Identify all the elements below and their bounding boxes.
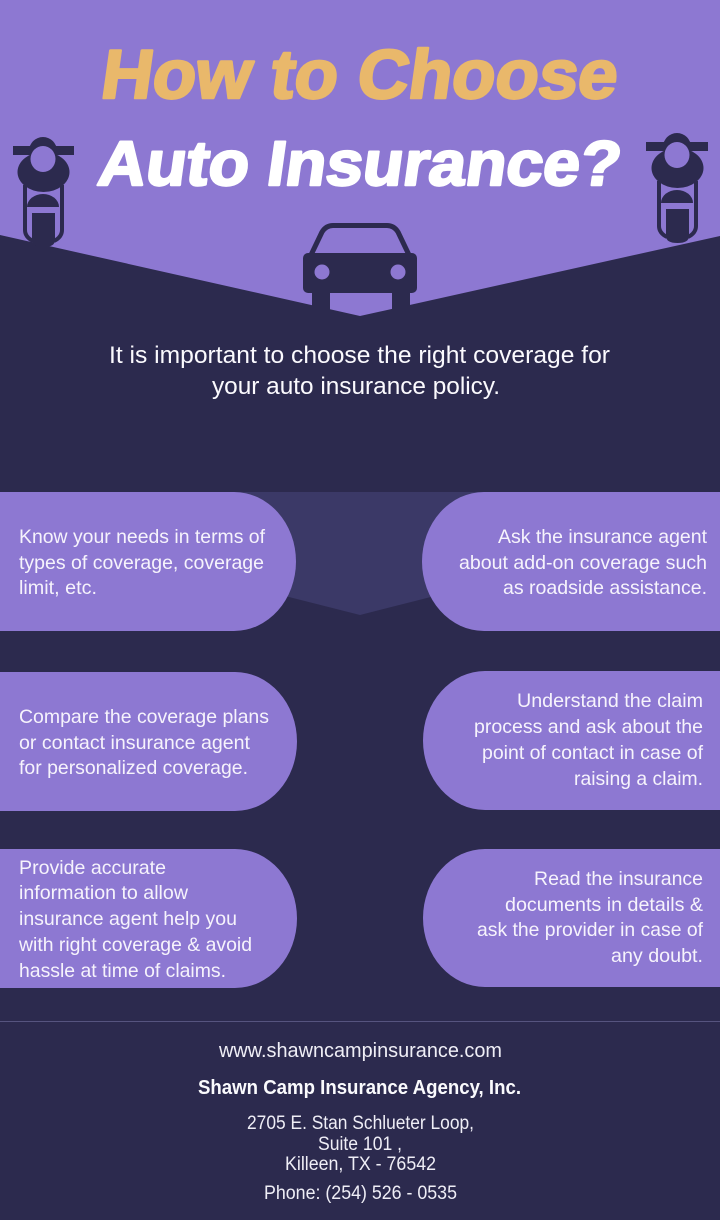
panel: ask about add-ons: Ask the insurance agent	[498, 527, 708, 548]
panel: understand claim process: process and ask about the	[474, 717, 703, 738]
address: 2705 E. Stan Schlueter Loop,	[247, 1113, 474, 1134]
panel: read the documents: any doubt.	[611, 946, 703, 967]
panel: ask about add-ons: as roadside assistance.	[503, 578, 707, 599]
panel: understand claim process: raising a claim.	[574, 769, 703, 790]
website: www.shawncampinsurance.com	[218, 1040, 502, 1062]
intro text: It is important to choose the right coverage for	[109, 342, 610, 369]
intro text	[109, 342, 610, 400]
address: Killeen, TX - 76542	[285, 1154, 436, 1175]
footer: contact details	[198, 1040, 521, 1204]
icon: left motorcycle	[13, 137, 74, 247]
panel: know your needs: types of coverage, coverage	[19, 553, 264, 574]
panel: read the documents: documents in details &	[505, 895, 703, 916]
panel: ask about add-ons: about add-on coverage such	[459, 553, 707, 574]
icon: right motorcycle	[646, 133, 708, 243]
panel: read the documents	[423, 849, 720, 987]
panel: read the documents: ask the provider in case of	[477, 920, 704, 941]
address	[247, 1113, 474, 1175]
panel: know your needs: limit, etc.	[19, 578, 97, 599]
background: purple header	[0, 0, 720, 340]
panel: provide accurate information: hassle at time of claims.	[19, 961, 226, 982]
panel: compare plans: or contact insurance agent	[19, 733, 251, 754]
panel: ask about add-ons	[422, 492, 720, 631]
panel: provide accurate information: Provide accurate	[19, 858, 166, 879]
panel: compare plans	[0, 672, 297, 811]
panel: understand claim process: point of contact in case of	[482, 743, 704, 764]
panel: compare plans: for personalized coverage.	[19, 758, 248, 779]
panel: read the documents: Read the insurance	[534, 869, 703, 890]
phone: Phone: (254) 526 - 0535	[264, 1183, 457, 1204]
centre chevron band	[230, 492, 490, 615]
panel: know your needs	[0, 492, 296, 631]
panel: understand claim process: Understand the claim	[517, 691, 703, 712]
panel: provide accurate information	[0, 849, 297, 988]
address: Suite 101 ,	[318, 1134, 402, 1155]
title	[94, 35, 626, 199]
panel: understand claim process	[423, 671, 720, 810]
panel: know your needs: Know your needs in terms of	[19, 527, 266, 548]
title line 2: Auto Insurance?	[94, 129, 626, 199]
icon: car	[303, 226, 417, 310]
panel: compare plans: Compare the coverage plans	[19, 707, 269, 728]
intro text: your auto insurance policy.	[212, 373, 500, 400]
panel: provide accurate information: insurance agent help you	[19, 909, 237, 930]
agency name: Shawn Camp Insurance Agency, Inc.	[198, 1077, 521, 1099]
panel: provide accurate information: with right coverage & avoid	[18, 935, 252, 956]
panel: provide accurate information: information to allow	[19, 883, 188, 904]
title line 1: How to Choose	[97, 35, 624, 113]
